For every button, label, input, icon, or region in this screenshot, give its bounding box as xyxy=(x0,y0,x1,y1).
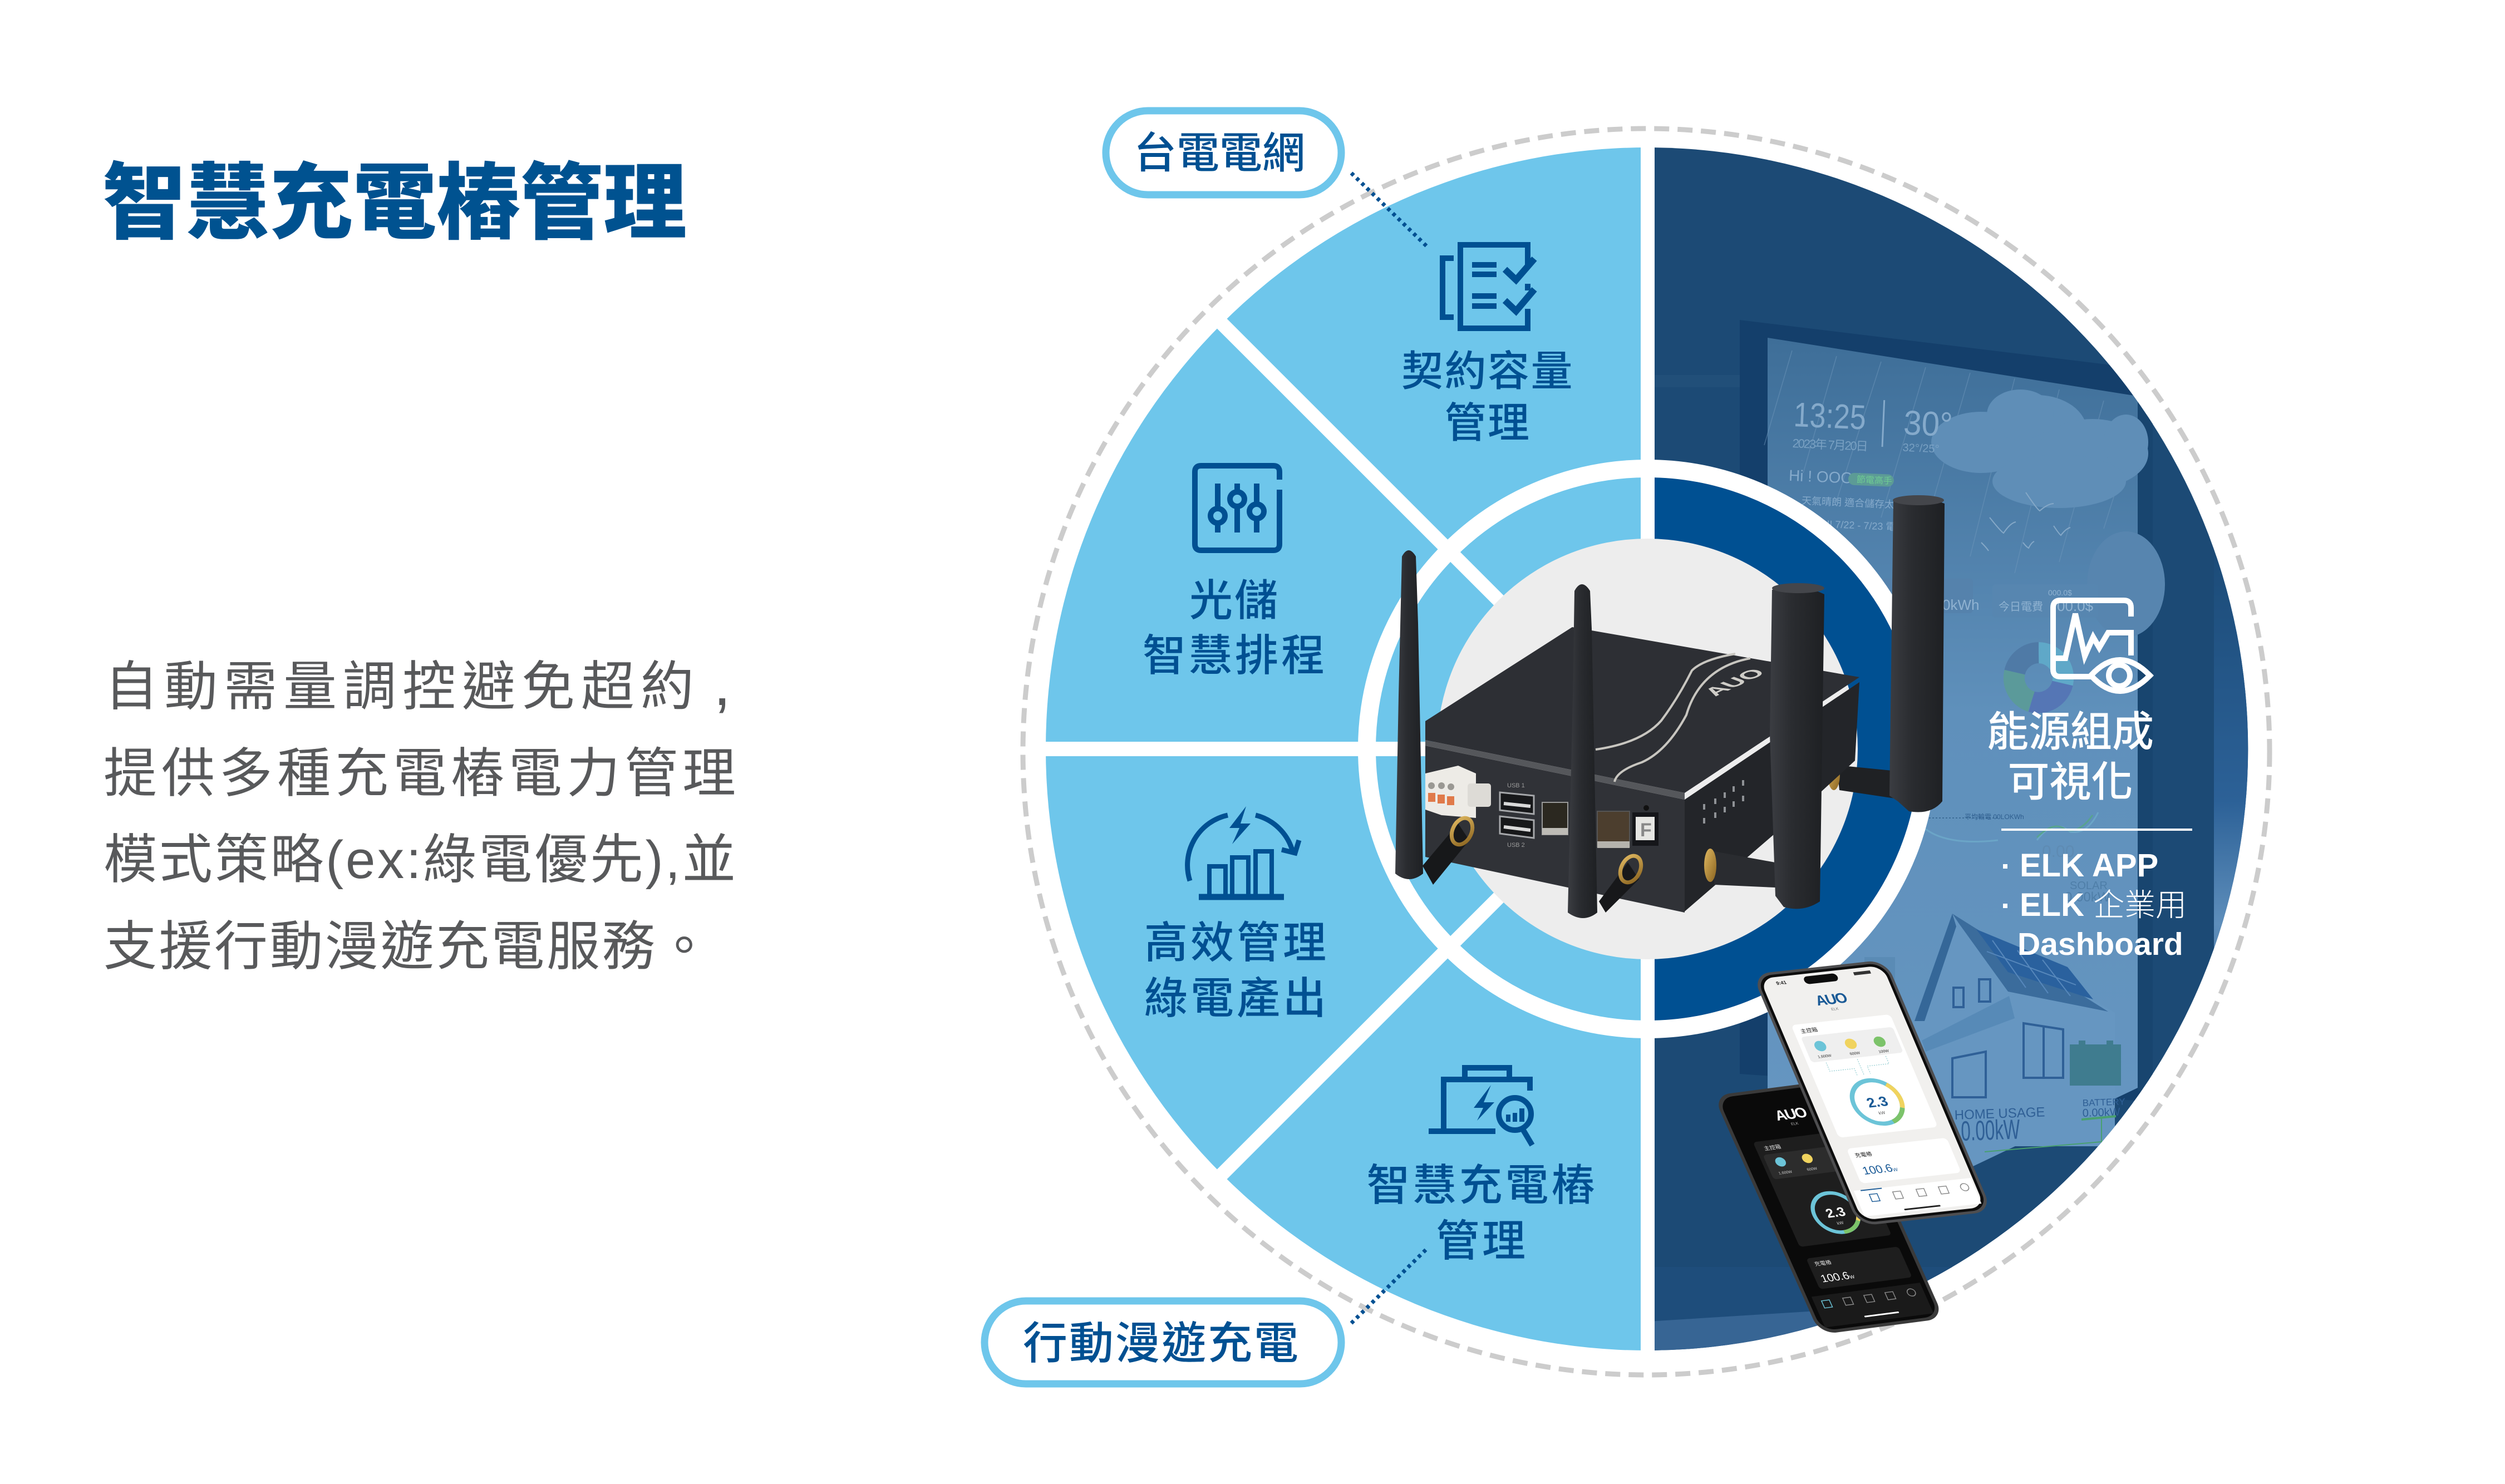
callout pill: 台電電網 xyxy=(1106,111,1341,195)
house: 0.00kW xyxy=(1960,1113,2021,1147)
AUO logo: AUO xyxy=(1697,666,1770,698)
phone: white app screen xyxy=(1752,960,1992,1226)
panel: photo background of wall display xyxy=(1647,139,2260,1363)
dashboard readouts: 30° xyxy=(1903,404,1953,444)
label: 智慧充電樁管理 xyxy=(1366,1161,1598,1265)
icon: sliders xyxy=(1195,466,1279,550)
icon: contract document xyxy=(1443,245,1534,328)
wall panel frame: SOLAR xyxy=(2070,880,2108,892)
label: 高效管理綠電產出: 高效管理 xyxy=(1144,918,1329,967)
router device xyxy=(1395,495,1945,918)
body text: 提供多種充電樁電力管理 xyxy=(104,744,740,803)
label: 能源組成可視化 xyxy=(1987,708,2154,805)
wall panel frame: 0.00 xyxy=(2042,842,2074,861)
phone: dark app screen: 600W xyxy=(1807,1167,1818,1172)
center grey disc xyxy=(1437,539,1858,959)
phone: dark app screen: kW xyxy=(1836,1220,1845,1226)
body text: 支援行動漫遊充電服務。 xyxy=(104,903,712,980)
icon: smart charging pile xyxy=(1429,1068,1532,1145)
antenna thick front xyxy=(1770,583,1824,909)
house xyxy=(1864,914,2125,1152)
phone: dark app screen: 1,600W xyxy=(1778,1170,1793,1176)
list: ELK products: ELK 企業用 xyxy=(2020,887,2187,923)
dashboard readouts: 節電高手 xyxy=(1857,474,1892,486)
icon: green energy cycle xyxy=(1188,806,1299,897)
phone: dark app screen: AUO xyxy=(1772,1104,1809,1124)
rain streaks xyxy=(1764,351,2137,573)
body text: 自動需量調控避免超約 xyxy=(105,657,700,717)
antenna connectors xyxy=(1423,815,1775,913)
label: 契約容量管理: 管理 xyxy=(1444,400,1531,446)
dashed outer ring xyxy=(1023,129,2270,1375)
phone: white app screen: 主控箱 xyxy=(1799,1026,1819,1034)
donut chart xyxy=(2014,653,2063,703)
body text: , xyxy=(713,649,737,718)
label: 高效管理綠電產出 xyxy=(1144,918,1329,1023)
wall panel frame: 0.00kW xyxy=(2065,890,2110,905)
callout connector bottom xyxy=(1351,1249,1426,1323)
house: 0.00kW xyxy=(2082,1106,2120,1120)
antenna thin middle xyxy=(1568,584,1597,918)
list: ELK products xyxy=(2003,847,2187,962)
USB ports: USB 1 xyxy=(1507,782,1525,789)
callout pill: 台電電網: 台電電網 xyxy=(1134,130,1305,178)
phone: white app screen: 600W xyxy=(1849,1052,1861,1056)
white ring and sector gaps xyxy=(1035,134,1928,1363)
chassis front face xyxy=(1425,746,1685,913)
phone: white app screen: AUO xyxy=(1812,989,1849,1009)
label: 光儲智慧排程 xyxy=(1143,576,1327,680)
phone: white app screen: 9:41 xyxy=(1775,980,1788,986)
label: 能源組成可視化: 能源組成 xyxy=(1987,708,2154,755)
icon: energy visualisation xyxy=(2053,600,2150,691)
wall panel frame xyxy=(1740,320,2165,1167)
phone: dark app screen: 主控箱 xyxy=(1763,1143,1782,1152)
dashboard readouts xyxy=(1787,396,1953,535)
phone: dark app screen: 2.3 xyxy=(1823,1205,1848,1221)
phone: white app screen: 充電樁 xyxy=(1854,1150,1873,1159)
phone: dark app screen: 100.6W xyxy=(1819,1269,1857,1285)
ethernet ports xyxy=(1542,802,1630,848)
dashboard readouts: 13:25 xyxy=(1793,396,1867,437)
usage cards: 0kWh xyxy=(1942,596,1979,613)
callout connector top xyxy=(1351,173,1426,246)
label: 高效管理綠電產出: 綠電產出 xyxy=(1144,974,1329,1023)
callout pill: 行動漫遊充電 xyxy=(985,1301,1341,1384)
label: 能源組成可視化: 可視化 xyxy=(2007,758,2133,805)
divider under energy label xyxy=(2001,829,2192,831)
body text: 模式策略(ex:綠電優先),並 xyxy=(104,830,738,890)
chassis top face xyxy=(1425,627,1859,793)
dashboard readouts: Hi ! OOO ! xyxy=(1788,467,1862,487)
panel: inner dark-blue band xyxy=(1376,477,1919,1020)
swoosh lines xyxy=(1596,654,1735,750)
usage cards xyxy=(1870,579,2098,618)
label: 契約容量管理: 契約容量 xyxy=(1401,348,1574,395)
usage cards: 00.0$ xyxy=(2057,598,2094,614)
phone: dark app screen xyxy=(1713,1079,1944,1334)
phone: white app screen: ELK xyxy=(1830,1007,1840,1012)
body text xyxy=(104,649,740,980)
chassis right face xyxy=(1685,682,1859,911)
dashboard readouts: 2023年 7月20日 xyxy=(1792,436,1868,453)
F button xyxy=(1632,805,1658,846)
side LEDs xyxy=(1703,780,1744,824)
dashboard readouts: 天氣晴朗 適合儲存太陽能 ! xyxy=(1802,495,1920,511)
phone: white app screen: 100W xyxy=(1878,1049,1890,1054)
label: 光儲智慧排程: 智慧排程 xyxy=(1143,631,1327,680)
far antenna A4 connector xyxy=(1828,759,1895,798)
wall panel frame: 平均輸電 00LOKWh xyxy=(1965,812,2024,821)
label: 智慧充電樁管理: 智慧充電樁 xyxy=(1366,1161,1598,1210)
dashboard readouts: 32°/25° xyxy=(1902,442,1940,455)
phone: white app screen: 2.3 xyxy=(1864,1093,1891,1111)
house: BATTERY xyxy=(2082,1096,2125,1108)
USB ports xyxy=(1500,782,1534,849)
callout pill: 行動漫遊充電: 行動漫遊充電 xyxy=(1023,1319,1300,1368)
dashboard readouts: !! 7/22 - 7/23 電價 xyxy=(1827,519,1906,533)
phone: white app screen: 100.6W xyxy=(1861,1162,1899,1177)
USB ports: USB 2 xyxy=(1507,842,1525,849)
label: 智慧充電樁管理: 管理 xyxy=(1436,1216,1528,1265)
house: HOME USAGE xyxy=(1954,1105,2045,1123)
label: 光儲智慧排程: 光儲 xyxy=(1189,576,1279,625)
list: ELK products: ELK APP xyxy=(2020,847,2158,884)
list: ELK products: Dashboard xyxy=(2017,926,2183,962)
birds xyxy=(1981,492,2070,551)
antenna right far xyxy=(1889,495,1945,812)
phone: white app screen: 1,600W xyxy=(1817,1054,1833,1059)
usage cards: 今日電費 xyxy=(1999,600,2043,613)
F button: F xyxy=(1640,820,1652,841)
terminal block xyxy=(1425,766,1491,818)
phone: dark app screen: ELK xyxy=(1790,1122,1799,1126)
phone: dark app screen: 充電樁 xyxy=(1813,1259,1833,1268)
antenna thin left xyxy=(1395,550,1423,879)
phone: white app screen: kW xyxy=(1878,1110,1886,1116)
usage cards: 000.0$ xyxy=(2048,588,2072,597)
label: 契約容量管理 xyxy=(1401,348,1574,446)
title: 智慧充電樁管理 xyxy=(102,156,687,250)
clouds xyxy=(1931,390,2148,508)
panel: left sectors xyxy=(1046,147,1647,1350)
